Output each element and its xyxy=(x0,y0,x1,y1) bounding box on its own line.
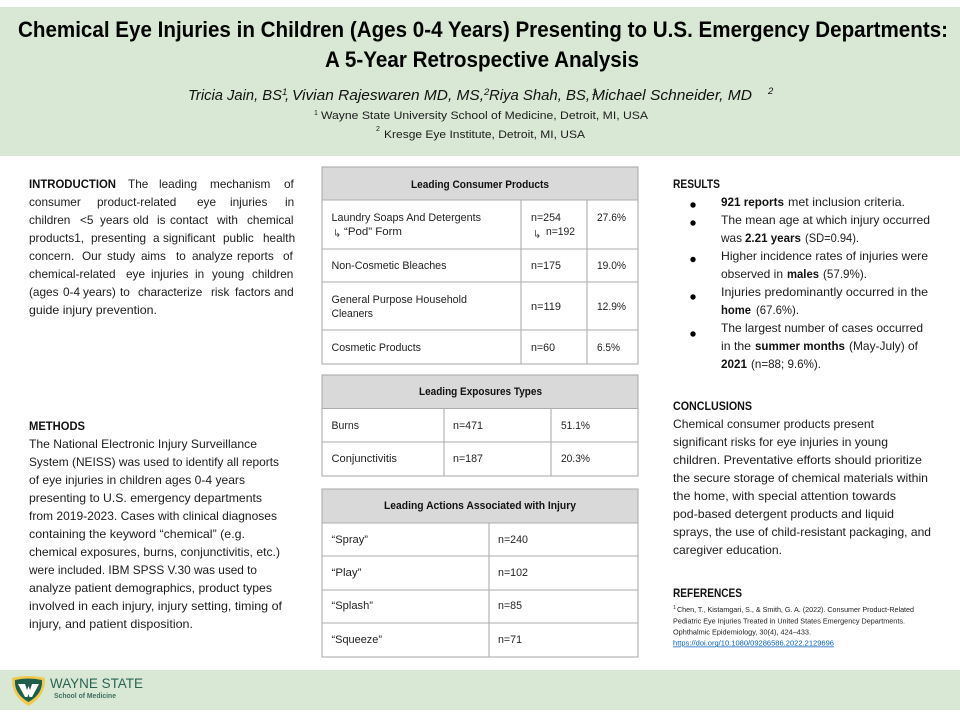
introduction text: young xyxy=(212,267,244,281)
results text: (57.9%). xyxy=(823,267,867,281)
results text: RESULTS xyxy=(673,178,720,191)
table: leading exposure types: n=471 xyxy=(453,420,483,432)
authors: 2 xyxy=(483,87,490,98)
methods text: injury, and patient disposition. xyxy=(29,617,193,631)
conclusions text: caregiver education. xyxy=(673,543,782,557)
references text: Pediatric Eye Injuries Treated in United States Emergency Departments. xyxy=(673,616,905,626)
introduction text: presenting xyxy=(91,231,146,245)
conclusions text: children. Preventative efforts should prioritize xyxy=(673,453,922,467)
introduction text: reports xyxy=(237,249,274,263)
conclusions text: CONCLUSIONS xyxy=(673,400,752,413)
introduction text: of xyxy=(284,177,295,191)
table: leading exposure types: 20.3% xyxy=(561,453,590,465)
conclusions text: the home, with special attention towards xyxy=(673,489,896,503)
table: leading exposure types: Conjunctivitis xyxy=(332,453,398,465)
affiliations: Wayne State University School of Medicine, Detroit, MI, USA xyxy=(321,110,649,122)
introduction text: a xyxy=(153,231,160,245)
table: leading consumer products xyxy=(322,167,638,364)
results text: summer months xyxy=(755,340,845,353)
introduction text: study xyxy=(107,249,135,263)
introduction text: concern. xyxy=(29,249,74,263)
table: leading consumer products: n=60 xyxy=(531,342,555,354)
introduction text: Our xyxy=(82,249,102,263)
methods text: presenting to U.S. emergency departments xyxy=(29,491,262,505)
introduction text xyxy=(29,177,295,317)
results text: observed in xyxy=(721,267,783,281)
conclusions text: pod-based detergent products and liquid xyxy=(673,507,894,521)
introduction text: INTRODUCTION xyxy=(29,178,116,191)
methods text: of eye injuries in children ages 0-4 years xyxy=(29,473,245,487)
table: leading consumer products: 6.5% xyxy=(597,342,620,354)
introduction text: and xyxy=(274,285,294,299)
introduction text: analyze xyxy=(192,249,233,263)
results text: home xyxy=(721,304,752,317)
table: leading actions associated with injury: “Splash” xyxy=(332,600,373,612)
affiliations: 2 xyxy=(376,126,380,133)
introduction text: to xyxy=(120,285,130,299)
introduction text: injuries xyxy=(230,195,267,209)
conclusions text: sprays, the use of child-resistant packaging, and xyxy=(673,525,931,539)
methods text: chemical exposures, burns, conjunctivitis, etc.) xyxy=(29,545,280,559)
table: leading actions associated with injury: “Squeeze” xyxy=(332,634,382,646)
introduction text: eye xyxy=(126,267,145,281)
table: leading consumer products: ↳ xyxy=(333,227,341,240)
table: leading consumer products: Cosmetic Products xyxy=(332,342,422,354)
methods text: The National Electronic Injury Surveillance xyxy=(29,437,257,451)
table: leading consumer products: Laundry Soaps And Detergents xyxy=(332,212,482,224)
results text: Higher incidence rates of injuries were xyxy=(721,249,928,263)
introduction text: children xyxy=(29,213,70,227)
authors: Michael Schneider, MD xyxy=(592,87,752,104)
table: leading consumer products: Cleaners xyxy=(332,308,374,320)
results text: males xyxy=(787,268,819,281)
introduction text: chemical-related xyxy=(29,267,116,281)
introduction text: (ages xyxy=(29,285,59,299)
table: leading consumer products: Leading Consumer Products xyxy=(411,179,549,191)
table: leading consumer products: “Pod” Form xyxy=(344,226,402,238)
introduction text: 0-4 xyxy=(63,285,80,299)
table: leading exposure types: n=187 xyxy=(453,453,483,465)
introduction text: mechanism xyxy=(210,177,270,191)
methods text: analyze patient demographics, product types xyxy=(29,581,272,595)
introduction text: <5 xyxy=(80,213,94,227)
methods text: containing the keyword “chemical” (e.g. xyxy=(29,527,245,541)
table: leading consumer products: n=175 xyxy=(531,260,561,272)
table: leading consumer products: n=254 xyxy=(531,212,561,224)
authors xyxy=(188,86,774,104)
results text xyxy=(673,178,930,371)
methods text: from 2019-2023. Cases with clinical diagnoses xyxy=(29,509,277,523)
table: leading exposure types xyxy=(322,375,638,476)
introduction text: risk xyxy=(211,285,229,299)
table: leading consumer products: 27.6% xyxy=(597,212,626,224)
Wayne State School of Medicine wordmark xyxy=(50,675,143,700)
introduction text: years) xyxy=(83,285,116,299)
introduction text: The xyxy=(128,177,149,191)
conclusions text: Chemical consumer products present xyxy=(673,417,875,431)
introduction text: aims xyxy=(141,249,166,263)
title xyxy=(18,17,948,72)
affiliations: 1 xyxy=(314,110,318,117)
authors: 1 xyxy=(282,87,287,98)
introduction text: in xyxy=(285,195,294,209)
results text: 2.21 years xyxy=(745,232,801,245)
table: leading actions associated with injury: n=71 xyxy=(498,634,522,646)
results text: (n=88; 9.6%). xyxy=(751,357,821,371)
table: leading actions associated with injury: Leading Actions Associated with Injury xyxy=(384,500,576,512)
affiliations: Kresge Eye Institute, Detroit, MI, USA xyxy=(384,129,586,141)
table: leading actions associated with injury: n=102 xyxy=(498,567,528,579)
introduction text: health xyxy=(263,231,295,245)
results text: (SD=0.94). xyxy=(805,231,859,245)
introduction text: old xyxy=(133,213,149,227)
table: leading consumer products: 19.0% xyxy=(597,260,626,272)
methods text: were included. IBM SPSS V.30 was used to xyxy=(28,563,257,577)
results text: 921 reports xyxy=(721,196,784,209)
table: leading exposure types: 51.1% xyxy=(561,420,590,432)
authors: Riya Shah, BS, xyxy=(489,87,590,104)
authors: 1 xyxy=(592,87,597,98)
results text: The mean age at which injury occurred xyxy=(721,213,930,227)
table: leading consumer products: ↳ xyxy=(533,228,541,241)
introduction text: contact xyxy=(170,213,209,227)
results text: 2021 xyxy=(721,358,748,371)
introduction text: product-related xyxy=(97,195,176,209)
introduction text: guide injury prevention. xyxy=(29,303,157,317)
introduction text: years xyxy=(100,213,129,227)
icon: Wayne State shield logo xyxy=(12,676,45,706)
introduction text: consumer xyxy=(29,195,81,209)
Wayne State School of Medicine wordmark: WAYNE STATE xyxy=(50,675,143,691)
results text: was xyxy=(720,231,742,245)
results text: Injuries predominantly occurred in the xyxy=(721,285,928,299)
introduction text: chemical xyxy=(247,213,294,227)
conclusions text: significant risks for eye injuries in young xyxy=(673,435,888,449)
results text: (May-July) of xyxy=(849,339,919,353)
table: leading consumer products: n=192 xyxy=(546,226,575,238)
conclusions text: the secure storage of chemical materials within xyxy=(673,471,928,485)
table: leading actions associated with injury: n=240 xyxy=(498,534,528,546)
table: leading actions associated with injury xyxy=(322,489,638,657)
methods text: involved in each injury, injury setting, timing of xyxy=(29,599,283,613)
introduction text: is xyxy=(157,213,166,227)
introduction text: of xyxy=(283,249,294,263)
references text: Chen, T., Kistamgari, S., & Smith, G. A. (2022). Consumer Product-Related xyxy=(677,605,914,614)
results text: met inclusion criteria. xyxy=(788,195,905,209)
introduction text: products1, xyxy=(29,231,84,245)
introduction text: characterize xyxy=(138,285,203,299)
introduction text: children xyxy=(252,267,293,281)
references text: REFERENCES xyxy=(673,587,742,600)
table: leading exposure types: Burns xyxy=(332,420,360,432)
table: leading actions associated with injury: “Spray” xyxy=(332,534,368,546)
header band xyxy=(0,7,960,156)
methods text xyxy=(28,420,283,631)
Wayne State School of Medicine wordmark: School of Medicine xyxy=(54,693,116,700)
references text: Ophthalmic Epidemiology, 30(4), 424–433. xyxy=(673,628,811,636)
table: leading actions associated with injury: “Play” xyxy=(332,567,362,579)
authors: , xyxy=(285,87,289,104)
table: leading exposure types: Leading Exposures Types xyxy=(419,386,542,398)
affiliations xyxy=(314,110,649,141)
table: leading actions associated with injury: n=85 xyxy=(498,600,522,612)
methods text: System (NEISS) was used to identify all reports xyxy=(29,455,279,469)
introduction text: public xyxy=(223,231,254,245)
footer band xyxy=(0,670,960,710)
references text: https://doi.org/10.1080/09286586.2022.2129696 xyxy=(673,638,834,648)
introduction text: significant xyxy=(163,231,216,245)
table: leading consumer products: General Purpose Household xyxy=(332,294,467,306)
references text: 1 xyxy=(673,605,676,611)
introduction text: eye xyxy=(197,195,216,209)
introduction text: in xyxy=(195,267,204,281)
introduction text: injuries xyxy=(151,267,188,281)
introduction text: with xyxy=(216,213,238,227)
authors: Tricia Jain, BS xyxy=(188,87,282,104)
references text xyxy=(673,587,914,648)
table: leading consumer products: 12.9% xyxy=(597,301,626,313)
authors: Vivian Rajeswaren MD, MS, xyxy=(292,87,484,104)
results text: The largest number of cases occurred xyxy=(721,321,923,335)
table: leading consumer products: n=119 xyxy=(531,301,561,313)
conclusions text xyxy=(673,400,931,557)
introduction text: factors xyxy=(235,285,271,299)
introduction text: to xyxy=(176,249,186,263)
results text: in the xyxy=(721,339,751,353)
methods text: METHODS xyxy=(29,420,85,433)
authors: 2 xyxy=(767,86,774,97)
table: leading consumer products: Non-Cosmetic Bleaches xyxy=(332,260,447,272)
results text: (67.6%). xyxy=(756,303,799,317)
title: A 5-Year Retrospective Analysis xyxy=(325,47,639,72)
introduction text: leading xyxy=(159,177,197,191)
